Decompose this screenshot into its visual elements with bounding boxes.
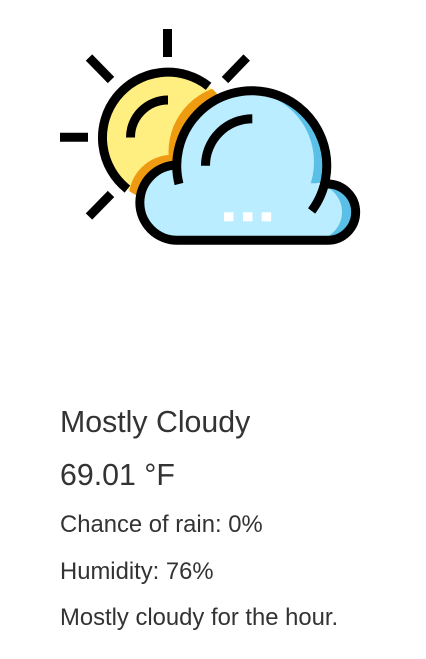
text: chance of rain: Chance of rain: 0% [60, 511, 263, 538]
icon: cloud [140, 91, 356, 241]
text: temperature: 69.01 °F [60, 459, 175, 492]
text: summary: Mostly cloudy for the hour. [60, 604, 338, 631]
icon: sun [98, 68, 218, 196]
heading: conditions: Mostly Cloudy [60, 406, 250, 439]
text: humidity: Humidity: 76% [60, 558, 214, 585]
icon: sun rays [60, 29, 247, 216]
icon: cloud dots [224, 212, 271, 221]
icon: sun behind cloud [60, 29, 360, 245]
